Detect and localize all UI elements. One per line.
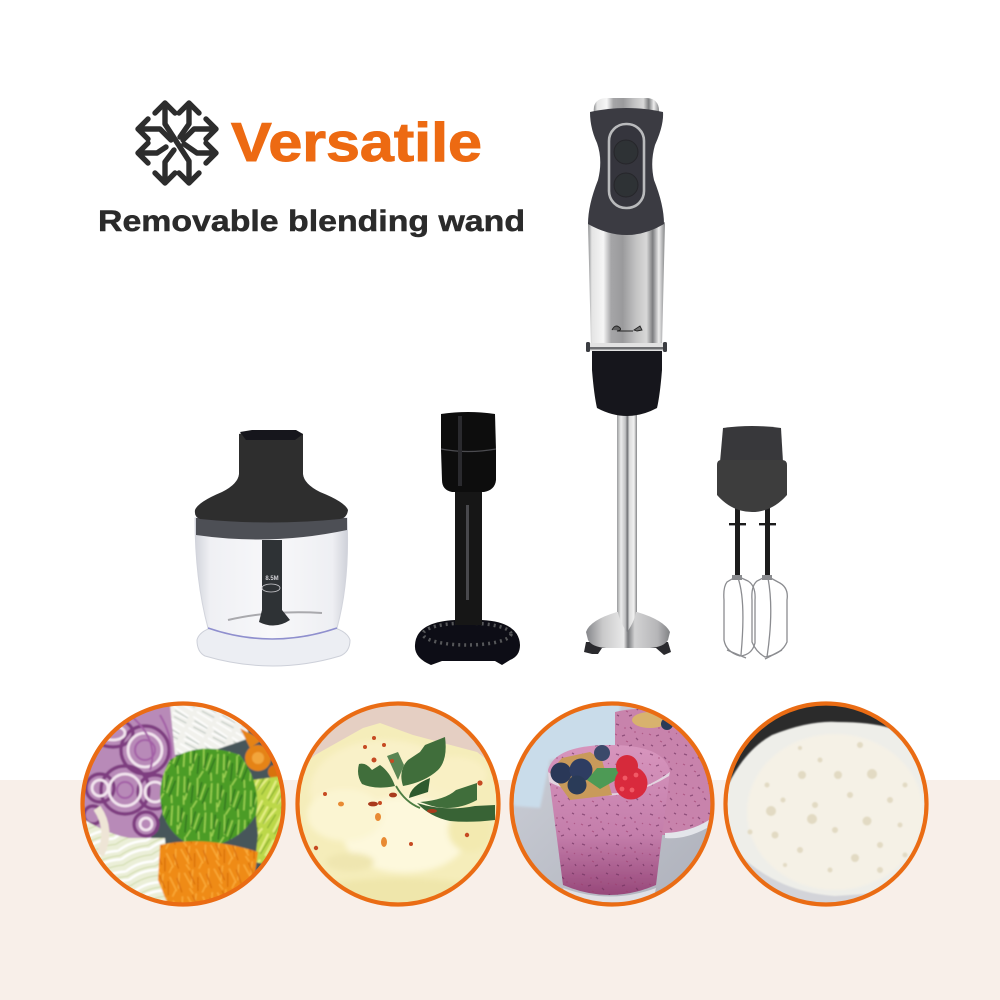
blue towel	[514, 706, 620, 808]
product: masher attachment	[415, 412, 520, 665]
inner blade	[228, 612, 322, 620]
masher socket	[441, 412, 496, 492]
chilli flakes	[314, 736, 483, 850]
photo circle: shredded vegetables	[80, 700, 290, 910]
mash mounds	[307, 740, 492, 908]
metal top cap	[594, 98, 659, 113]
subtitle: Removable blending wand: Removable blending wand	[98, 205, 525, 238]
blender foot	[584, 605, 671, 655]
whisk hub	[720, 426, 783, 462]
blender shaft	[617, 412, 637, 617]
product: hand blender wand	[584, 98, 671, 655]
steel body	[588, 222, 665, 347]
clear bowl	[195, 518, 348, 639]
parsley leaves	[358, 737, 495, 822]
masher slots	[423, 623, 511, 645]
product: chopper bowl	[195, 430, 350, 666]
front glass	[548, 745, 670, 902]
central post	[259, 540, 290, 626]
rear glass	[615, 709, 712, 838]
central post: 8.5M	[265, 576, 279, 582]
bottom background band	[0, 780, 1000, 1000]
masher base	[415, 620, 520, 665]
button panel	[609, 124, 644, 208]
photo circle: mashed potato	[290, 700, 505, 910]
icon: outward arrows	[138, 103, 216, 183]
grip handle	[588, 108, 664, 235]
collar	[586, 342, 667, 352]
black lower housing	[592, 351, 662, 416]
photo circle: berry smoothie	[505, 700, 720, 910]
product: twin whisk attachment	[717, 426, 787, 659]
lime cabbage	[252, 776, 282, 864]
logo signature	[612, 326, 642, 331]
title: Versatile: Versatile	[231, 111, 482, 173]
white cabbage	[85, 820, 170, 905]
masher stem	[455, 488, 482, 625]
foam	[747, 734, 923, 890]
red onion rings	[80, 700, 176, 840]
foam bubbles	[748, 742, 908, 873]
black lid	[195, 431, 348, 522]
band under the lid	[196, 518, 347, 539]
white radish	[170, 705, 250, 755]
whisk rods	[729, 508, 776, 580]
shredded carrot	[158, 841, 258, 910]
bowl rim line	[208, 628, 337, 639]
zucchini	[160, 749, 257, 848]
white bowl	[728, 720, 924, 897]
whisk wires	[724, 576, 787, 659]
photo circle: frothy milk	[720, 700, 935, 910]
carrot slices	[240, 728, 282, 779]
toppings	[550, 745, 648, 800]
bowl base	[197, 625, 350, 666]
